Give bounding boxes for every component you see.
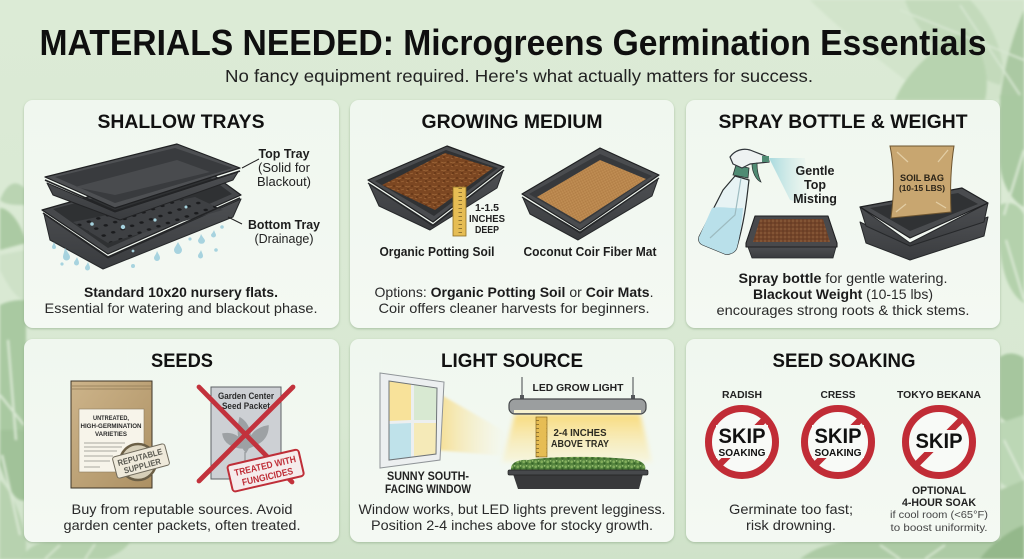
icon: radish skip soaking bbox=[708, 389, 776, 476]
subtitle: No fancy equipment required. Here's what actually matters for success. bbox=[225, 66, 813, 86]
icon: crossed out garden center packet bbox=[199, 387, 304, 492]
text: medium description: Coir offers cleaner harvests for beginners. bbox=[378, 300, 650, 316]
icon: kraft seed pouch with reputable supplier seal: UNTREATED, bbox=[93, 415, 129, 422]
label: gentle top misting: Top bbox=[804, 178, 826, 192]
icon: LED grow light over tray bbox=[502, 377, 652, 489]
icon: cress skip soaking: SOAKING bbox=[814, 447, 862, 459]
icon: kraft seed pouch with reputable supplier seal: VARIETIES bbox=[95, 431, 128, 438]
label: depth: DEEP bbox=[475, 224, 499, 236]
panel: seeds bbox=[24, 339, 339, 542]
text: germinate too fast: risk drowning. bbox=[746, 517, 836, 533]
heading: growing medium: GROWING MEDIUM bbox=[422, 112, 602, 133]
text: light description: Position 2-4 inches above for stocky growth. bbox=[371, 517, 653, 533]
text: trays description: Standard 10x20 nursery flats. bbox=[84, 284, 278, 300]
label: depth: 1-1.5 bbox=[475, 202, 499, 214]
text: light description bbox=[358, 501, 666, 533]
label: coconut coir fiber mat: Coconut Coir Fiber Mat bbox=[524, 245, 657, 259]
label: LED grow light: LED GROW LIGHT bbox=[532, 382, 624, 394]
label: depth: INCHES bbox=[469, 213, 505, 225]
label: organic potting soil: Organic Potting Soil bbox=[380, 245, 494, 259]
callout: top tray: (Solid for bbox=[258, 161, 310, 175]
text: trays description: Essential for watering and blackout phase. bbox=[44, 300, 318, 316]
label: gentle top misting: Misting bbox=[793, 192, 837, 206]
icon: kraft seed pouch with reputable supplier seal: REPUTABLE bbox=[116, 446, 164, 468]
text: optional soak note: if cool room (<65°F) bbox=[890, 509, 988, 521]
text: spray and weight description bbox=[716, 270, 970, 318]
icon: sunny window bbox=[380, 373, 506, 468]
icon: stacked trays with soil bag weight bbox=[860, 146, 988, 260]
label: distance above tray: 2-4 INCHES bbox=[554, 428, 607, 439]
label: sunny south-facing window: FACING WINDOW bbox=[385, 484, 471, 496]
callout: bottom tray: Bottom Tray bbox=[248, 218, 320, 232]
icon: kraft seed pouch with reputable supplier seal bbox=[71, 381, 170, 488]
icon: crossed out garden center packet: Garden Center bbox=[218, 391, 274, 401]
heading: spray bottle and weight: SPRAY BOTTLE & WEIGHT bbox=[718, 112, 968, 133]
text: seeds description: garden center packets, often treated. bbox=[64, 517, 300, 533]
icon: crossed out garden center packet: FUNGICIDES bbox=[241, 466, 294, 489]
panel: spray bottle and weight bbox=[686, 100, 1000, 328]
label: distance above tray bbox=[551, 428, 609, 450]
icon: radish skip soaking: SKIP bbox=[718, 425, 766, 448]
text: light description: Window works, but LED lights prevent legginess. bbox=[358, 501, 666, 517]
icon: crossed out garden center packet: Seed Packet bbox=[222, 401, 270, 411]
icon: cress skip soaking bbox=[804, 389, 872, 476]
callout: bottom tray bbox=[248, 218, 320, 246]
label: gentle top misting bbox=[793, 164, 837, 206]
heading: shallow trays: SHALLOW TRAYS bbox=[98, 112, 264, 133]
icon: cress skip soaking: CRESS bbox=[820, 389, 856, 401]
text: optional soak note bbox=[890, 485, 988, 534]
label: gentle top misting: Gentle bbox=[796, 164, 834, 178]
text: medium description bbox=[374, 284, 654, 316]
icon: kraft seed pouch with reputable supplier seal: HIGH-GERMINATION bbox=[80, 423, 142, 430]
callout: top tray: Blackout) bbox=[257, 175, 311, 189]
icon: stacked trays with soil bag weight: SOIL BAG bbox=[900, 173, 944, 184]
icon: radish skip soaking: RADISH bbox=[722, 389, 762, 401]
text: spray and weight description: encourages strong roots & thick stems. bbox=[716, 302, 970, 318]
icon: coir mat tray bbox=[522, 148, 659, 240]
text: germinate too fast: Germinate too fast; bbox=[729, 501, 853, 517]
text: optional soak note: OPTIONAL bbox=[912, 485, 966, 497]
text: trays description bbox=[44, 284, 318, 316]
panel: seed soaking bbox=[686, 339, 1000, 542]
text: seeds description: Buy from reputable sources. Avoid bbox=[72, 501, 292, 517]
icon: cress skip soaking: SKIP bbox=[814, 425, 862, 448]
icon: stacked trays with water drops bbox=[42, 144, 259, 270]
label: distance above tray: ABOVE TRAY bbox=[551, 439, 609, 450]
callout: bottom tray: (Drainage) bbox=[254, 232, 314, 246]
icon: stacked trays with soil bag weight: (10-15 LBS) bbox=[899, 184, 945, 193]
panel: shallow trays bbox=[24, 100, 339, 328]
heading: seeds: SEEDS bbox=[151, 351, 213, 372]
icon: small soil tray bbox=[746, 216, 837, 258]
icon: tokyo bekana skip: SKIP bbox=[916, 430, 962, 453]
icon: tokyo bekana skip: TOKYO BEKANA bbox=[897, 389, 981, 401]
panel: light source bbox=[350, 339, 674, 542]
text: optional soak note: to boost uniformity. bbox=[890, 522, 988, 534]
icon: radish skip soaking: SOAKING bbox=[718, 447, 766, 459]
callout: top tray: Top Tray bbox=[258, 147, 310, 161]
heading: light source: LIGHT SOURCE bbox=[441, 351, 583, 372]
icon: soil tray with ruler bbox=[368, 146, 504, 236]
label: sunny south-facing window: SUNNY SOUTH- bbox=[387, 471, 469, 483]
text: optional soak note: 4-HOUR SOAK bbox=[902, 497, 976, 509]
icon: tokyo bekana skip bbox=[897, 389, 981, 476]
panel: growing medium bbox=[350, 100, 674, 328]
text: spray and weight description: Spray bottle for gentle watering. bbox=[738, 270, 948, 286]
label: sunny south-facing window bbox=[385, 471, 471, 496]
heading: seed soaking: SEED SOAKING bbox=[772, 351, 916, 372]
text: seeds description bbox=[64, 501, 300, 533]
icon: crossed out garden center packet: TREATED WITH bbox=[233, 454, 297, 479]
title: MATERIALS NEEDED: Microgreens Germination Essentials bbox=[40, 22, 986, 63]
text: spray and weight description: Blackout Weight (10-15 lbs) bbox=[753, 286, 933, 302]
icon: spray bottle with mist bbox=[699, 149, 808, 254]
callout: top tray bbox=[257, 147, 311, 189]
text: germinate too fast bbox=[729, 501, 853, 533]
label: depth bbox=[469, 202, 505, 236]
icon: kraft seed pouch with reputable supplier seal: SUPPLIER bbox=[123, 456, 162, 476]
text: medium description: Options: Organic Potting Soil or Coir Mats. bbox=[374, 284, 654, 300]
